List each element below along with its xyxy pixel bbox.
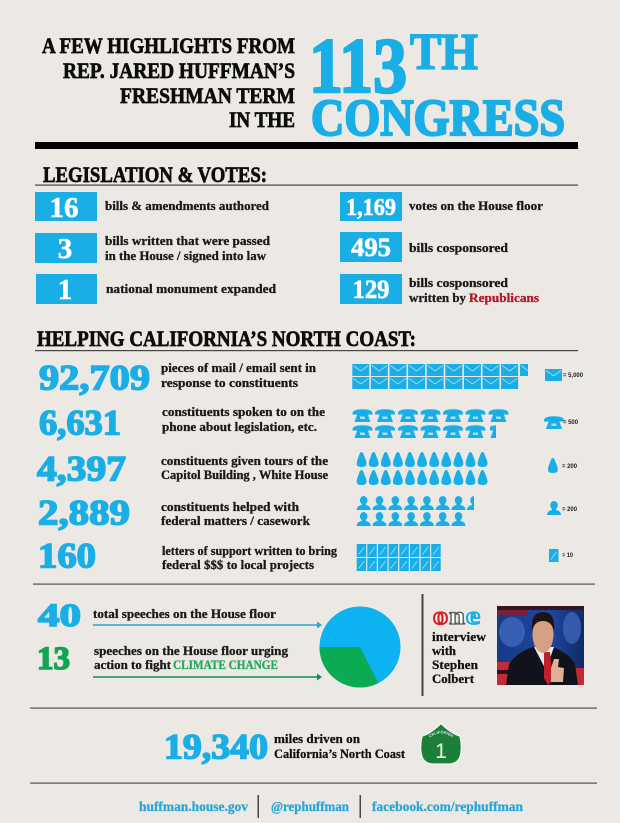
panel: Colbert interview: Stephen <box>432 657 479 672</box>
stat: 495 cosponsored <box>340 232 508 262</box>
panel: Colbert interview: Colbert <box>432 671 475 686</box>
panel: 160 letters: federal $$$ to local projects <box>162 558 314 572</box>
stat: 1 national monument: national monument expanded <box>106 282 276 296</box>
panel: Colbert interview <box>432 603 584 686</box>
panel: speeches: action to fight <box>94 658 172 672</box>
panel: 4,397 tours <box>37 448 578 488</box>
panel: 2,889 casework: federal matters / casework <box>161 514 310 528</box>
panel: miles driven <box>164 726 406 766</box>
pictogram: letters <box>357 544 441 571</box>
panel: speeches: 40 <box>38 598 81 634</box>
text: one <box>433 603 480 630</box>
panel: 2,889 casework <box>38 496 577 531</box>
stat: 3 bills passed: in the House / signed into law <box>105 249 266 263</box>
panel: speeches: speeches on the House floor urging <box>94 644 289 658</box>
footer links: @rephuffman <box>271 800 349 815</box>
panel: miles driven: miles driven on <box>274 731 361 746</box>
panel: 2,889 casework: 2,889 <box>38 492 130 532</box>
pictogram: phones <box>352 409 508 438</box>
stat: 3 bills passed <box>35 233 270 265</box>
panel: speeches: total speeches on the House floor <box>93 607 276 621</box>
title: 113th Congress <box>309 22 565 147</box>
header intro text: FRESHMAN TERM <box>120 83 295 108</box>
legend: phone <box>544 416 579 429</box>
panel: speeches: CLIMATE CHANGE <box>173 658 278 672</box>
panel: speeches <box>37 598 400 688</box>
legend: person: = 200 <box>562 507 578 513</box>
stat: 129 written by Republicans <box>340 274 539 305</box>
legend: envelope <box>545 369 584 381</box>
stat: 16 bills: bills & amendments authored <box>105 199 269 213</box>
panel: 92,709 mail: 92,709 <box>39 358 150 398</box>
icon: California route 1 shield: 1 <box>435 740 447 763</box>
legend: phone: = 500 <box>563 420 579 426</box>
panel: miles driven: 19,340 <box>164 726 268 766</box>
stat: 129 written by Republicans: bills cosponsored <box>409 276 508 290</box>
stat: 1 national monument: 1 <box>58 274 72 306</box>
stat: 3 bills passed: 3 <box>58 233 72 265</box>
legend: drop <box>548 458 578 473</box>
text: one: n <box>449 603 465 630</box>
stat: 1,169 votes: votes on the House floor <box>409 199 543 213</box>
header intro text: REP. JARED HUFFMAN’S <box>63 58 295 83</box>
legend: letter <box>549 549 574 562</box>
panel: 4,397 tours: 4,397 <box>37 448 126 488</box>
header intro text: IN THE <box>229 107 295 132</box>
stat: 16 bills <box>35 192 269 224</box>
stat: 129 written by Republicans: Republicans <box>469 291 539 305</box>
panel: 160 letters: letters of support written to bring <box>162 544 338 558</box>
text: one: o <box>433 603 448 630</box>
stat: 1 national monument <box>36 274 276 306</box>
panel: Colbert interview: interview <box>432 629 487 644</box>
panel: 2,889 casework: constituents helped with <box>161 500 299 514</box>
stat: 1,169 votes <box>340 192 543 221</box>
title: 113th Congress: TH <box>410 24 478 81</box>
stat: 129 written by Republicans: written by <box>409 291 467 305</box>
panel: 4,397 tours: Capitol Building , White House <box>161 468 328 482</box>
footer links: facebook.com/rephuffman <box>372 800 523 815</box>
heading: legislation and votes: LEGISLATION & VOTES: <box>43 162 267 187</box>
icon: California route 1 shield: CALIFORNIA <box>428 730 453 738</box>
icon: California route 1 shield <box>420 723 462 764</box>
arrow: blue <box>93 622 322 628</box>
legend: person <box>547 501 578 515</box>
header intro text <box>42 33 295 132</box>
stat: 495 cosponsored: bills cosponsored <box>409 241 508 255</box>
panel: Colbert interview: with <box>432 643 457 658</box>
header intro text: A FEW HIGHLIGHTS FROM <box>42 33 295 58</box>
stat: 129 written by Republicans: 129 <box>352 275 390 304</box>
title: 113th Congress: CONGRESS <box>311 90 565 147</box>
header rule <box>35 142 578 149</box>
panel: legislation stats <box>35 192 543 306</box>
footer links <box>139 795 523 818</box>
text: one: e <box>466 603 480 630</box>
panel: 6,631 phone: phone about legislation, etc. <box>162 420 317 434</box>
arrow: green <box>93 674 322 680</box>
panel: 6,631 phone: 6,631 <box>39 402 121 442</box>
stat: 495 cosponsored: 495 <box>351 233 391 262</box>
legend: envelope: = 5,000 <box>563 373 584 379</box>
legend: letter: = 10 <box>562 553 574 559</box>
panel: 4,397 tours: constituents given tours of the <box>161 454 328 468</box>
legend: drop: = 200 <box>562 464 578 470</box>
stat: 1,169 votes: 1,169 <box>346 195 396 221</box>
image: Stephen Colbert portrait <box>497 606 584 685</box>
footer links: huffman.house.gov <box>139 800 248 815</box>
stat: 16 bills: 16 <box>50 192 78 224</box>
pictogram: drops <box>357 452 488 485</box>
panel: 160 letters: 160 <box>38 536 96 576</box>
panel: 92,709 mail: pieces of mail / email sent in <box>161 361 316 375</box>
panel: 6,631 phone: constituents spoken to on the <box>162 405 325 419</box>
pictogram: envelopes <box>352 364 537 389</box>
pie chart <box>320 606 400 688</box>
heading: helping California's North Coast: HELPING CALIFORNIA’S NORTH COAST: <box>37 326 416 351</box>
panel: 92,709 mail <box>39 362 583 396</box>
panel: 92,709 mail: response to constituents <box>161 376 298 390</box>
pictogram: people <box>357 496 481 526</box>
title: 113th Congress: 113 <box>309 22 407 109</box>
panel: speeches: 13 <box>37 641 70 677</box>
stat: 3 bills passed: bills written that were passed <box>105 234 270 248</box>
panel: miles driven: California’s North Coast <box>274 746 406 761</box>
panel: 6,631 phone <box>39 406 578 441</box>
panel: 160 letters <box>38 536 574 576</box>
